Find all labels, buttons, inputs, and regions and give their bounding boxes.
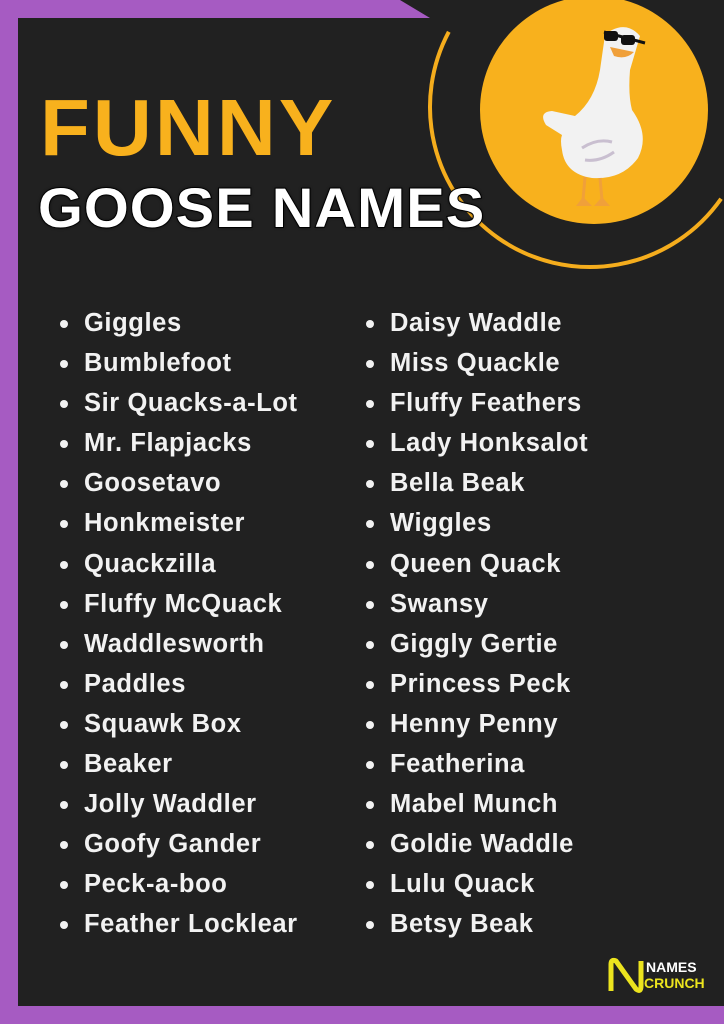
list: left column: Fluffy McQuack [84,590,282,618]
list: left column: Jolly Waddler [84,790,257,818]
list: left column: Sir Quacks-a-Lot [84,389,298,417]
list: left column: Mr. Flapjacks [84,429,252,457]
list: right column [366,309,588,938]
list: right column: Bella Beak [390,469,525,497]
list: right column: Mabel Munch [390,790,558,818]
list: right column: Wiggles [390,509,492,537]
list: left column: Goofy Gander [84,830,261,858]
logo: NAMES [646,959,697,975]
list: left column: Peck-a-boo [84,870,227,898]
list: right column: Miss Quackle [390,349,560,377]
list: right column: Swansy [390,590,489,618]
list: right column: Daisy Waddle [390,309,562,337]
logo [608,958,705,993]
list: left column: Beaker [84,750,173,778]
list: left column [60,309,298,938]
list: right column: Betsy Beak [390,910,534,938]
list: right column: Queen Quack [390,550,561,578]
list: right column: Featherina [390,750,525,778]
list: right column: Lady Honksalot [390,429,588,457]
list: right column: Princess Peck [390,670,571,698]
list: left column: Goosetavo [84,469,221,497]
list: left column: Giggles [84,309,182,337]
list: left column: Feather Locklear [84,910,298,938]
list: right column: Fluffy Feathers [390,389,582,417]
list: left column: Bumblefoot [84,349,232,377]
list: left column: Quackzilla [84,550,216,578]
logo: CRUNCH [644,975,705,991]
list: right column: Goldie Waddle [390,830,574,858]
list: left column: Paddles [84,670,186,698]
list: right column: Lulu Quack [390,870,535,898]
list: left column: Honkmeister [84,509,245,537]
title: FUNNY [40,83,336,172]
list: right column: Henny Penny [390,710,558,738]
list: left column: Squawk Box [84,710,242,738]
list: left column: Waddlesworth [84,630,265,658]
subtitle: GOOSE NAMES [38,176,485,239]
list: right column: Giggly Gertie [390,630,558,658]
